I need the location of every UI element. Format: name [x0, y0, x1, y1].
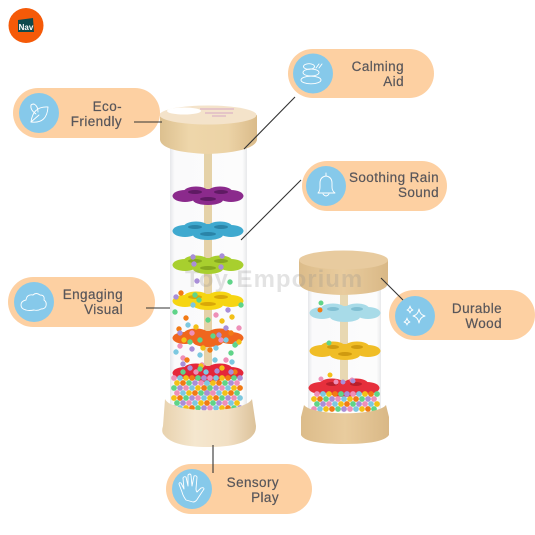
icon: stacked stones [301, 64, 322, 84]
large rain rattle [160, 106, 257, 447]
logo badge [8, 8, 44, 43]
icon: sparkles [404, 306, 425, 325]
icon: leaves [31, 104, 48, 122]
base [301, 405, 389, 444]
rod [340, 292, 348, 387]
bead pile [174, 378, 243, 408]
flower: yellow [172, 292, 244, 310]
callout: engaging visual [8, 277, 155, 327]
watermark: Toy Emporium [185, 266, 363, 293]
flower: red [308, 378, 380, 397]
scattered beads [320, 303, 353, 382]
callout: soothing rain sound: Sound [398, 185, 439, 200]
callout: durable wood: Wood [465, 316, 502, 331]
icon: cloud [21, 294, 46, 310]
callout: soothing rain sound: Soothing Rain [349, 170, 439, 185]
callout: durable wood: Durable [452, 301, 502, 316]
base [162, 399, 256, 447]
small rain rattle [299, 250, 389, 444]
flower: light blue [310, 304, 380, 322]
lid label [167, 108, 234, 116]
flower: orange [172, 328, 244, 347]
callout: durable wood [389, 290, 535, 340]
callout: eco-friendly: Friendly [71, 114, 122, 129]
flower: red [172, 364, 244, 382]
flower: lime [172, 256, 244, 274]
rod [204, 150, 212, 395]
tube [170, 148, 247, 410]
bead pile [314, 394, 378, 409]
callout: calming aid: Aid [383, 74, 404, 89]
icon: bell [318, 173, 335, 196]
flower: purple [172, 186, 244, 205]
callout: sensory play: Play [251, 490, 279, 505]
callout: calming aid [288, 49, 434, 98]
lid [160, 115, 257, 154]
flower: yellow [310, 342, 380, 360]
lid [299, 260, 388, 295]
tube [308, 288, 381, 412]
callout: sensory play [166, 464, 312, 514]
callout: eco-friendly: Eco- [93, 99, 122, 114]
flower: blue [172, 222, 244, 240]
callout: eco-friendly [13, 88, 160, 138]
logo badge: Nav [19, 23, 34, 32]
callout: sensory play: Sensory [227, 475, 279, 490]
icon: hand [179, 474, 204, 502]
callout: engaging visual: Visual [84, 302, 123, 317]
callout: soothing rain sound [302, 161, 447, 211]
connector lines [134, 97, 403, 473]
callout: calming aid: Calming [352, 59, 404, 74]
scattered beads [175, 256, 241, 372]
callout: engaging visual: Engaging [63, 287, 123, 302]
